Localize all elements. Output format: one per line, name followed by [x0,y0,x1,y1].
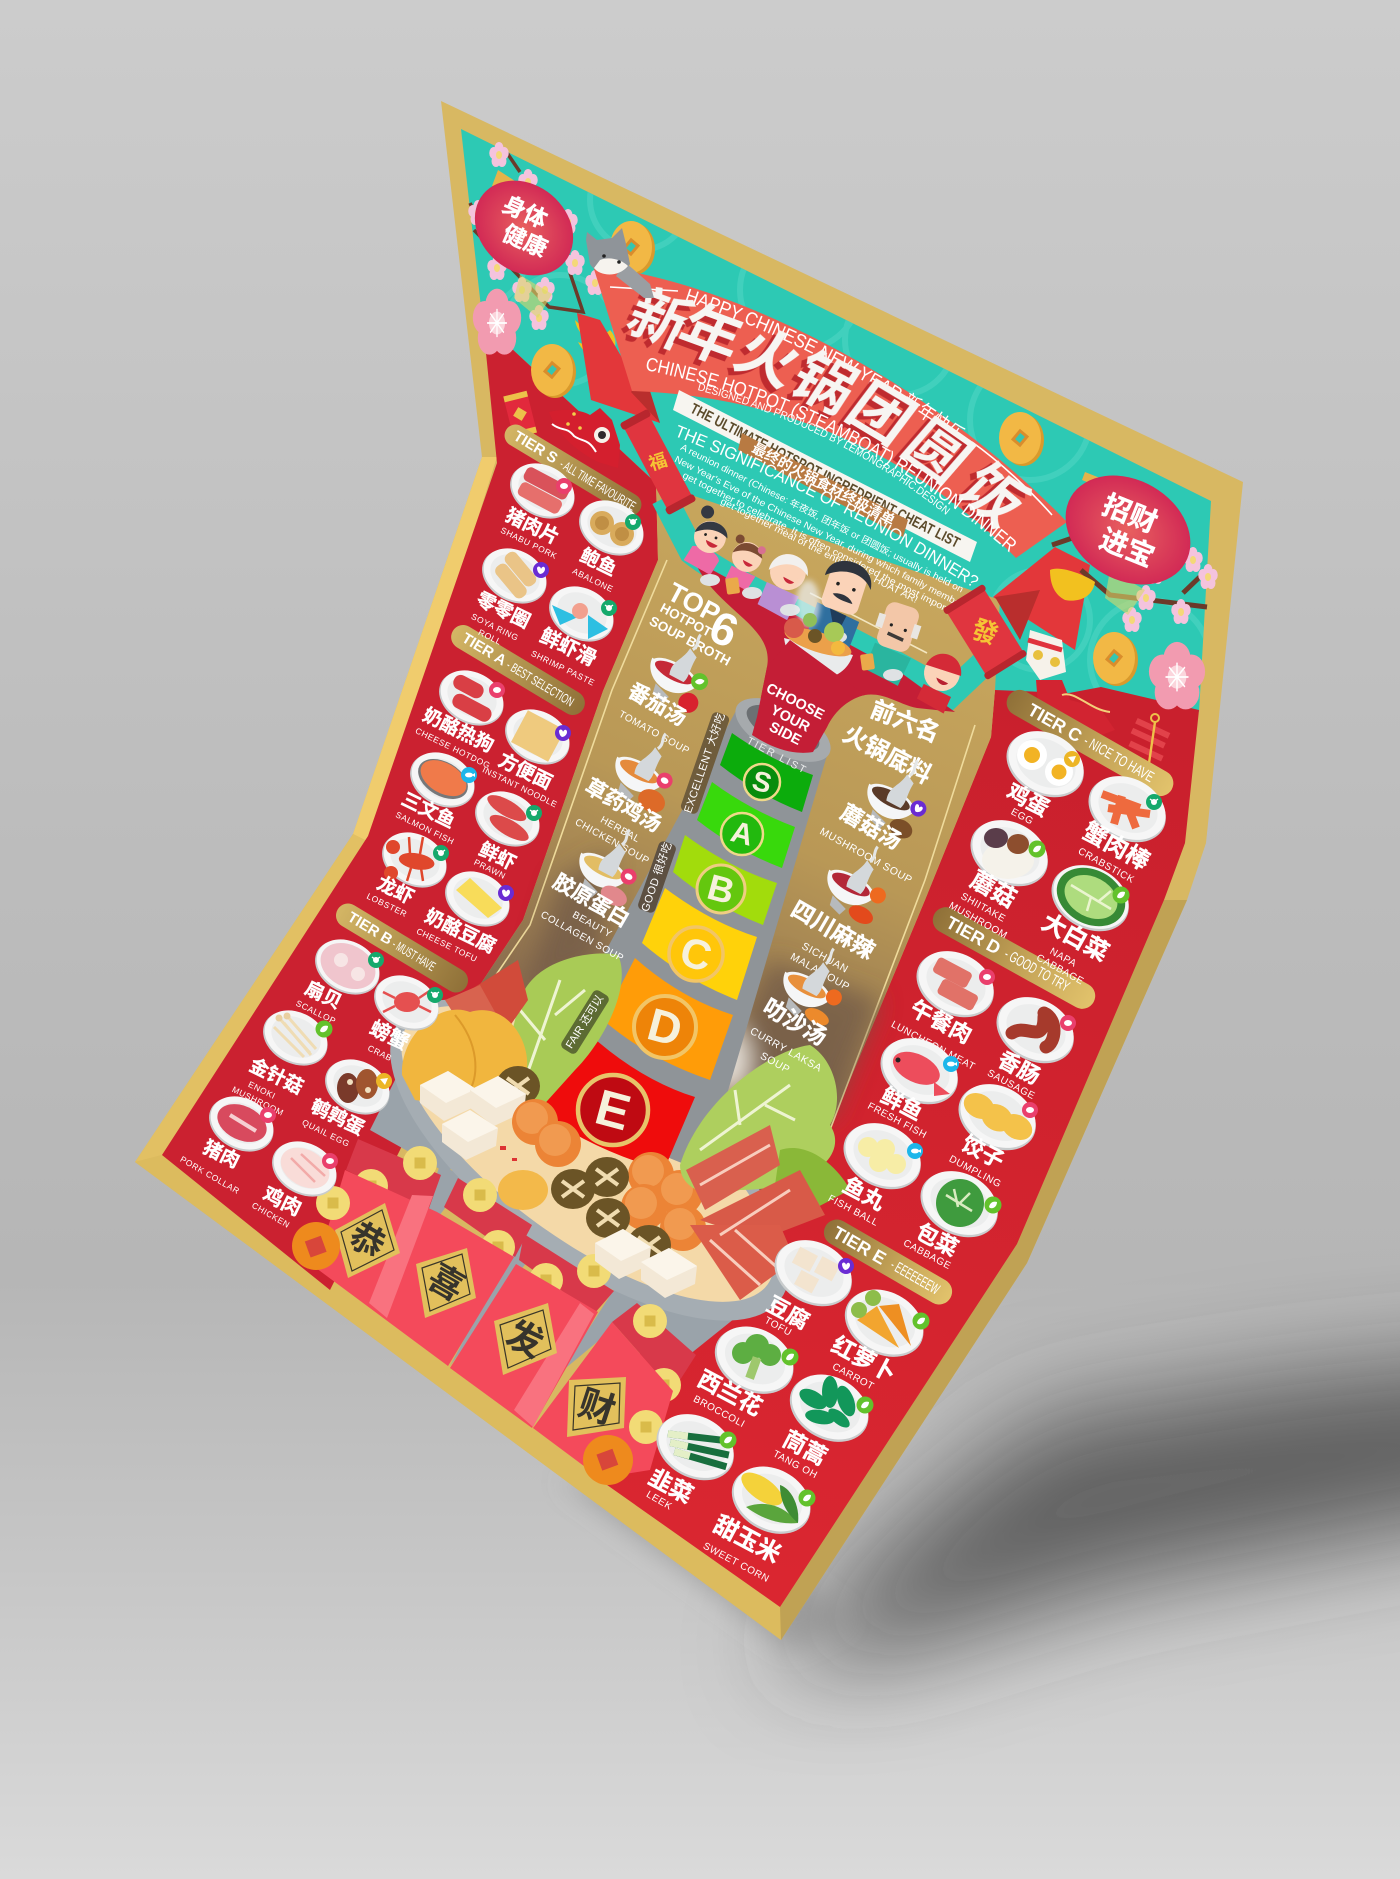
credit line: DESIGNED AND PRODUCED BY LEMONGRAPHIC.DESIGN [698,383,950,515]
white strip: ultimate cheat list: THE ULTIMATE HOTSPOT INGREDRIENT CHEAT LIST [687,400,963,552]
tier pill: A [447,621,589,719]
icon: grey cat peeking over ribbon [586,228,654,298]
tier pill: S [500,420,646,520]
tier pill: C: - NICE TO HAVE [1081,733,1157,786]
figure: mother [682,503,735,576]
main title: 新年火锅团圆饭: 年 [667,296,753,376]
cups and small bowls [700,574,903,681]
red envelopes [316,1139,696,1478]
food item: tang oh: TANG OH [771,1449,819,1481]
panel: left red tier list background [162,343,658,1290]
soup: beauty collagen: COLLAGEN SOUP [538,910,626,964]
panel: folded gold paper [135,101,1243,1640]
heading: top 6 hotpot soup broth [647,577,746,669]
tier letter S [744,764,780,800]
soup: beauty collagen [538,815,657,964]
food item: dumpling: DUMPLING [947,1154,1003,1190]
food item: chicken [250,1131,346,1230]
ribbon accent lines [610,287,1052,515]
main title: 新年火锅团圆饭: 锅 [779,342,869,426]
food item: shabu pork: SHABU PORK [499,525,559,561]
food item: cheese hotdog [414,660,513,771]
soup: mushroom: MUSHROOM SOUP [818,826,914,886]
soft shadow under bottom edge [560,1480,850,1650]
tier pill: D: TIER D [943,912,1004,959]
food item: luncheon meat: 午餐肉 [906,995,976,1049]
heading: top 6 hotpot soup broth: SOUP BROTH [647,613,733,669]
food item: napa cabbage: 大白菜 [1037,909,1113,967]
tier list tube [525,685,840,1172]
food item: fish ball [826,1110,932,1229]
soup: beauty collagen: BEAUTY [570,910,614,940]
white strip: ultimate cheat list [673,390,977,562]
lantern: 招财进宝: 进宝 [1095,523,1159,573]
food item: shiitake mushroom: 蘑菇 [965,867,1021,913]
food item: prawn [466,781,549,881]
envelope flaps [346,1139,696,1391]
food item: pork collar: 猪肉 [199,1136,243,1173]
food item: scallop: 扇贝 [301,976,346,1014]
icon: mandarin oranges [292,1222,633,1485]
food item: prawn: PRAWN [472,857,508,881]
food item: shiitake mushroom [947,807,1059,942]
lantern: 招财进宝: 招财 [1098,489,1162,539]
plum blossoms right [1122,547,1218,709]
food item: egg: 鸡蛋 [1003,779,1053,821]
food item: shabu pork [499,453,584,561]
food item: sweet corn [701,1454,822,1585]
food item: leek: 韭菜 [645,1464,697,1508]
icon: hanging ornament [1124,714,1170,773]
food item: soya ring roll: 零零圈 [473,588,534,633]
label: choose your side [763,681,827,749]
food item: broccoli: BROCCOLI [691,1394,747,1430]
soup: tomato [617,620,728,757]
family figures [682,503,966,715]
food item: chicken: CHICKEN [250,1200,292,1230]
label: choose your side: CHOOSE [763,681,827,724]
food item: tofu [762,1227,863,1339]
food item: sweet corn: 甜玉米 [709,1511,785,1569]
icon: scroll 发: 發 [968,614,1002,650]
food item: quail egg [301,1049,399,1149]
ribbon heading: happy chinese new year: HAPPY CHINESE NEW YEAR 新年快乐 [686,288,966,439]
food item: shrimp paste: 鲜虾滑 [536,624,600,671]
food item: shiitake mushroom: MUSHROOM [947,900,1009,942]
subtitle: chinese hotpot reunion dinner: CHINESE HOTPOT (STEAMBOAT) REUNION DINNER [646,358,1016,552]
text block: reunion dinner paragraph: A reunion dinner (Chinese: 年夜饭, 团年饭 or 团圆饭; usually is held on [679,441,966,595]
food item: enoki mushroom: ENOKI [247,1079,277,1101]
main title: 新年火锅团圆饭 [617,280,1040,539]
panel: central gold soup area [470,483,1000,1250]
tier letter B: B [703,866,739,912]
bowl legs: grey stand pieces [370,1060,765,1372]
soup: herbal chicken [573,719,695,867]
food item: crab [365,965,448,1063]
lantern: 身体健康: 健康 [499,220,551,262]
soup: sichuan mala: MALA SOUP [788,951,852,993]
text block: reunion dinner paragraph: New Year's Eve of the Chinese New Year, during which family members [673,454,970,613]
tier letter A: A [727,815,757,853]
food item: shabu pork: 猪肉片 [502,504,563,549]
food item: pork collar [178,1086,283,1196]
food item: prawn: 鲜虾 [475,838,519,875]
food item: leek: LEEK [644,1489,674,1513]
tier letter A [721,813,763,855]
heading: 前六名火锅底料: 前六名 [867,696,943,748]
food item: dumpling: 饺子 [958,1131,1008,1173]
gold tag: 恭 [335,1203,400,1278]
soup: curry laksa [748,934,861,1076]
food item: enoki mushroom [231,1000,337,1118]
food item: crabstick: CRABSTICK [1076,846,1136,886]
icon: firecracker [503,391,537,438]
tier band S [720,733,813,812]
food item: soya ring roll: SOYA RING [470,611,520,643]
heading: significance of reunion dinner: THE SIGNIFICANCE OF REUNION DINNER? [678,424,978,586]
food item: napa cabbage: NAPA [1048,946,1078,970]
food item: cheese tofu: 奶酪豆腐 [421,904,500,958]
food item: cabbage: CABBAGE [901,1238,953,1272]
food item: tang oh [771,1362,880,1481]
label: tier list: TIER LIST [745,735,809,777]
soup: curry laksa: SOUP [758,1050,792,1076]
soup: curry laksa: 叻沙汤 [759,993,831,1051]
food item: lobster: 龙虾 [373,872,417,909]
food item: fresh fish [866,1025,969,1141]
family funnel: red Y shape [694,560,955,753]
figure: grandfather [860,598,926,687]
tag: fair: FAIR 还可以 [563,993,606,1051]
food on hotpot: centre and right [551,1045,850,1300]
food item: napa cabbage: CABBAGE [1034,952,1086,988]
tier letter E [578,1075,648,1145]
food item: salmon fish: SALMON FISH [394,809,456,847]
label: choose your side: YOUR [768,702,813,736]
soup: beauty collagen: 胶原蛋白 [549,869,634,932]
left plum branch [470,150,583,312]
food item: shrimp paste: SHRIMP PASTE [529,648,597,688]
food item: fish ball: FISH BALL [826,1193,880,1229]
soup: tomato: 番茄汤 [624,679,690,731]
gold tag: 财: 财 [574,1382,620,1432]
tier letter E: E [590,1079,636,1141]
food item: fish ball: 鱼丸 [839,1173,889,1215]
tier pill: E: - EEEEEEEW [887,1257,943,1299]
title ribbon banner [593,266,1067,558]
soup: herbal chicken: CHICKEN SOUP [573,817,651,867]
heading: 前六名火锅底料 [838,696,943,789]
food item: fresh fish: FRESH FISH [866,1101,928,1141]
icon: red lion head left [549,408,620,468]
food item: lobster: LOBSTER [365,891,409,919]
food item: chicken: 鸡肉 [259,1182,305,1221]
food item: abalone: ABALONE [571,566,615,594]
food item: egg: EGG [1009,807,1035,827]
figure: father [803,555,877,658]
soup: sichuan mala: SICHUAN [800,940,850,976]
tier letter C: C [675,927,717,981]
gold tag: 喜: 喜 [421,1257,471,1309]
main title: 新年火锅团圆饭: 圆 [890,409,984,495]
shadow of the poster on the floor [770,1350,1400,1660]
icon: scroll 发 [942,584,1028,680]
food item: luncheon meat: LUNCHEON MEAT [889,1019,977,1073]
food item: quail egg: QUAIL EGG [301,1117,351,1149]
hotpot bowl [340,940,840,1380]
food item: cheese hotdog: CHEESE HOTDOG [414,725,492,771]
food item: instant noodle [481,699,579,810]
food item: luncheon meat [889,938,1005,1073]
food item: crab: CRAB [366,1043,394,1063]
heading: top 6 hotpot soup broth: HOTPOT [658,600,715,640]
food item: scallop: SCALLOP [294,998,338,1026]
tier pill: C: TIER C [1024,700,1085,746]
food item: crab: 螃蟹 [366,1016,412,1055]
food item: crabstick: 蟹肉棒 [1078,818,1154,876]
food item: tofu: TOFU [762,1315,794,1339]
icon: scroll 福: 福 [646,450,670,474]
tier pill: B: - MUST HAVE [390,936,439,974]
tier pill: B [332,899,472,997]
food item: shrimp paste [529,576,623,688]
food item: sweet corn: SWEET CORN [701,1541,771,1585]
icon: gold ingot left [575,320,615,362]
food item: salmon fish [394,742,484,847]
food item: pork collar: PORK COLLAR [178,1154,242,1196]
tier letter D: D [642,998,688,1056]
icon: lion head right [1026,630,1115,745]
food item: soya ring roll [470,538,556,647]
right plum branch [1052,533,1207,607]
tier pill: S: TIER S [510,428,561,467]
food item: broccoli: 西兰花 [693,1365,767,1421]
food item: instant noodle: INSTANT NOODLE [481,764,559,810]
food item: carrot: 红萝卜 [827,1331,901,1387]
food item: cheese tofu [415,861,519,964]
food item: sausage [985,984,1085,1102]
icon: noodle bowl with steam [782,580,854,698]
food item: fresh fish: 鲜鱼 [877,1083,927,1125]
lantern: 身体健康 [456,161,592,318]
lantern: 招财进宝 [1046,454,1210,615]
text block: reunion dinner paragraph: get-together meal of the entire year. HUAT AR! [719,496,920,606]
tier pill: C [1002,685,1178,801]
text block: reunion dinner paragraph: get together to celebrate. It is often considered the most important [681,470,964,622]
food item: broccoli [691,1314,805,1430]
tier pill: A: TIER A [459,630,509,669]
soup: herbal chicken: 草药鸡汤 [581,775,665,837]
figure: grandmother [756,549,813,622]
tier band D [603,958,733,1080]
food item: leek [644,1401,745,1513]
food item: shiitake mushroom: SHIITAKE [959,891,1007,925]
main title: 新年火锅团圆饭: 火 [724,317,812,399]
heading: top 6 hotpot soup broth: 6 [702,600,746,658]
half hidden coins [354,1169,388,1203]
ribbon tails: dark red [577,313,1090,650]
food item: salmon fish: 三文鱼 [398,787,459,833]
food on hotpot: left side [402,953,622,1210]
tier pill: E: TIER E [829,1222,890,1269]
main title: 新年火锅团圆饭: 团 [835,372,927,456]
gold tag: 发 [494,1303,557,1375]
tag: excellent: EXCELLENT 大好吃 [680,711,728,815]
envelope fronts [316,1170,514,1366]
food item: quail egg: 鹌鹑蛋 [307,1095,368,1140]
lantern: 身体健康: 身体 [499,191,551,233]
tier band A [697,782,795,868]
plum blossoms left [468,142,605,355]
icon: scroll 福 [619,409,697,515]
gold tag: 发: 发 [500,1313,550,1365]
tier pill: S: - ALL TIME FAVOURITE [557,456,639,514]
tier pill: A: - BEST SELECTION [504,657,577,709]
soup: curry laksa: CURRY LAKSA [748,1025,824,1075]
food item: sausage: SAUSAGE [985,1068,1037,1102]
tier pill: D [928,903,1100,1013]
food item: napa cabbage [1034,852,1140,988]
main title: 新年火锅团圆饭: 饭 [946,453,1040,539]
food item: crabstick [1076,763,1177,886]
panel: right red tier list background [600,687,1199,1607]
food item: abalone [570,490,653,594]
table line [810,593,927,653]
panel: teal header background [435,129,1211,720]
soup: sichuan mala: 四川麻辣 [787,896,879,964]
tier pill: D: - GOOD TO TRY [1001,946,1072,995]
heading: top 6 hotpot soup broth: TOP [663,577,725,629]
food item: abalone: 鲍鱼 [576,544,620,581]
main title: 新年火锅团圆饭: 新 [617,280,703,360]
soup: mushroom: 蘑菇汤 [836,800,906,854]
food item: scallop [294,929,389,1026]
food item: instant noodle: 方便面 [495,748,556,794]
tier letter D [634,996,696,1058]
food item: carrot [827,1277,935,1393]
teal ribbon running behind the family [664,498,1008,695]
tag: good: GOOD 很好吃 [638,840,675,913]
food item: carrot: CARROT [830,1361,876,1393]
food item: cabbage: 包菜 [912,1219,962,1261]
soup: sichuan mala [787,832,905,993]
food item: tofu: 豆腐 [763,1292,813,1334]
food item: cabbage [901,1158,1009,1272]
tier band B [673,835,777,925]
heading: 前六名火锅底料: 火锅底料 [838,721,936,789]
soup: tomato: TOMATO SOUP [617,709,691,757]
food item: cheese tofu: CHEESE TOFU [415,926,479,964]
food item: tang oh: 茼蒿 [779,1426,831,1470]
soup: herbal chicken: HERBAL [598,815,642,845]
food item: lobster [365,822,456,919]
tier pill: E [819,1215,957,1309]
food item: enoki mushroom: MUSHROOM [231,1084,285,1118]
food item: egg [995,718,1095,827]
food item: dumpling [947,1071,1047,1190]
gold tag: 喜 [416,1248,476,1318]
brown strip: chinese cheat list: 最终的火锅食材终极清单 [749,439,898,530]
tier band E [530,1033,695,1170]
food item: soya ring roll: ROLL [477,627,503,647]
label: choose your side: SIDE [766,719,804,749]
food item: enoki mushroom: 金针菇 [246,1053,307,1099]
icon: gold coins on envelopes [316,1146,667,1444]
icon: gold coins header [531,221,1138,686]
soup: mushroom [818,746,945,886]
funnel stem over tube [752,640,865,753]
tier band C [642,888,757,1000]
figure: boy [913,649,966,715]
gold tag: 财 [567,1377,626,1437]
food item: sausage: 香肠 [994,1047,1044,1089]
tier letter S: S [749,765,775,799]
icon: gold ingot right [1050,569,1095,601]
tier pill: B: TIER B [344,909,396,949]
gold tag: 恭: 恭 [342,1215,392,1267]
figure: girl [721,533,768,592]
food item: cheese hotdog: 奶酪热狗 [419,704,497,757]
